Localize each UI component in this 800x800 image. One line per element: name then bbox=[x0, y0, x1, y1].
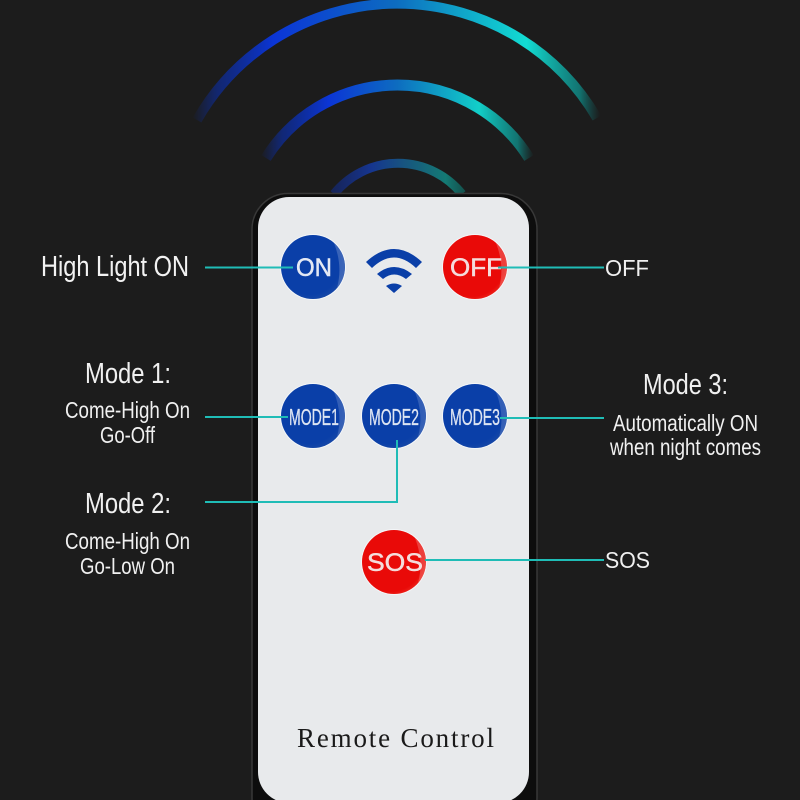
button: MODE3 bbox=[442, 383, 508, 449]
label: Mode 3: Mode 3: bbox=[643, 369, 728, 401]
line: Mode 2 bbox=[205, 440, 397, 502]
button: MODE2: MODE2 bbox=[369, 404, 419, 430]
wave: middle bbox=[266, 85, 529, 158]
button: MODE1: MODE1 bbox=[289, 404, 339, 430]
wave: inner bbox=[334, 163, 462, 194]
label: Mode 2: Mode 2: bbox=[85, 488, 171, 520]
button: ON: ON bbox=[296, 254, 332, 282]
button: ON bbox=[280, 234, 346, 300]
label: Mode 3: Automatically ON bbox=[613, 410, 758, 436]
icon: wifi bbox=[366, 249, 422, 293]
label: Mode 1: Mode 1: bbox=[85, 358, 171, 390]
label: Mode 2 bbox=[65, 488, 190, 579]
signal waves bbox=[197, 4, 597, 194]
line: ON bbox=[205, 266, 293, 268]
button: OFF bbox=[442, 234, 508, 300]
line: Mode 1 bbox=[205, 416, 288, 418]
label: Mode 1 bbox=[65, 358, 190, 448]
label: Mode 1: Go-Off bbox=[100, 422, 155, 448]
button: MODE1 bbox=[280, 383, 346, 449]
label: OFF: OFF bbox=[605, 255, 649, 281]
label: Mode 2: Go-Low On bbox=[80, 553, 175, 579]
button: MODE2 bbox=[361, 383, 427, 449]
label: High Light ON: High Light ON bbox=[41, 251, 189, 283]
button: SOS: SOS bbox=[367, 549, 423, 577]
button: SOS bbox=[361, 529, 427, 595]
connector lines bbox=[205, 268, 604, 560]
line: Mode 3 bbox=[500, 417, 604, 419]
button: MODE3: MODE3 bbox=[450, 404, 500, 430]
label: Mode 3: when night comes bbox=[609, 434, 761, 460]
line: SOS bbox=[425, 559, 604, 561]
remote label: Remote Control bbox=[297, 723, 494, 753]
remote body bbox=[252, 194, 537, 800]
line: OFF bbox=[498, 266, 604, 268]
wave: outer bbox=[197, 4, 597, 120]
remote control bbox=[252, 194, 537, 800]
label: SOS: SOS bbox=[605, 547, 650, 573]
label: Mode 2: Come-High On bbox=[65, 528, 190, 554]
button: OFF: OFF bbox=[450, 254, 502, 282]
label: Mode 3 bbox=[609, 369, 761, 460]
label: Mode 1: Come-High On bbox=[65, 397, 190, 423]
remote face bbox=[258, 197, 529, 800]
